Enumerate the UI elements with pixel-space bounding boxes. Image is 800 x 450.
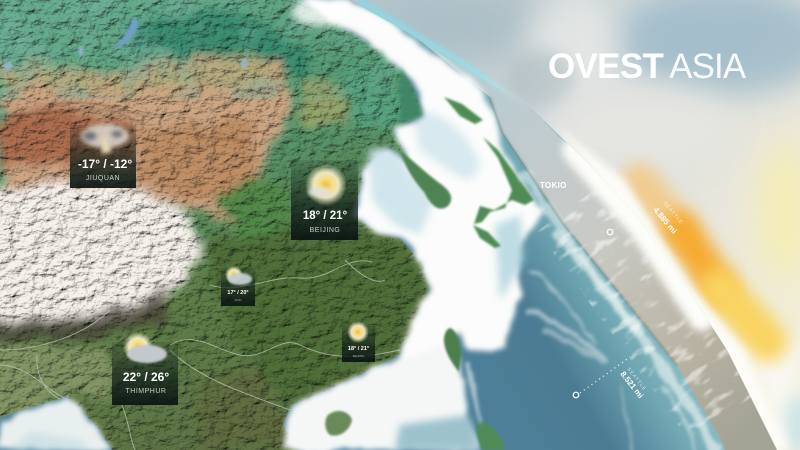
marker ring xyxy=(573,392,579,398)
weather card: Beijing small xyxy=(342,321,375,362)
land base xyxy=(0,0,450,450)
rivers xyxy=(0,260,400,450)
icon: sun behind cloud xyxy=(305,164,347,206)
top cloud veil xyxy=(292,0,348,26)
weather card: Thimphur xyxy=(112,332,178,405)
temperature: 17° / 20° xyxy=(227,290,249,296)
bright atmosphere edge xyxy=(358,0,525,105)
temperature: 18° / 21° xyxy=(348,346,369,352)
limb haze band xyxy=(422,42,777,450)
terrain relief texture xyxy=(0,0,450,450)
weather card: Xi'an small xyxy=(221,266,255,306)
distance label: 8.521 mi xyxy=(618,370,645,400)
temperature: 18° / 21° xyxy=(303,210,348,222)
brown ridges xyxy=(0,103,252,142)
korean peninsula xyxy=(400,150,451,209)
city name: THIMPHUR xyxy=(126,388,166,395)
leader dots xyxy=(580,357,630,393)
city name: XIAN xyxy=(234,298,242,302)
hainan xyxy=(325,411,352,436)
green patches xyxy=(2,3,398,100)
japan islands xyxy=(444,97,534,248)
ocean cloud streaks xyxy=(467,175,715,450)
taiwan xyxy=(444,328,461,372)
icon: sun and cloud xyxy=(225,266,252,285)
northern coast islands xyxy=(400,67,423,125)
temperature: -17° / -12° xyxy=(78,157,132,171)
icon: storm cloud xyxy=(81,124,129,154)
place label: SEATTLE xyxy=(661,200,684,226)
city name: BEIJING xyxy=(310,227,340,234)
limb dark inner edge xyxy=(490,97,677,365)
orange glow band xyxy=(640,182,768,342)
label: Tokio: TOKIO xyxy=(540,181,567,190)
weather card: Jiuquan xyxy=(70,124,136,188)
marker: Seattle second distance xyxy=(573,357,647,400)
lake baikal xyxy=(112,17,138,49)
limb cloud specks xyxy=(538,191,750,434)
limb white cloud xyxy=(575,150,702,318)
title: OVESTASIA xyxy=(548,47,747,86)
icon: sun xyxy=(347,321,369,343)
land colour zones xyxy=(0,15,425,450)
coastal cloud mass xyxy=(0,0,542,450)
icon: sun and cloud xyxy=(123,332,167,363)
leader dots xyxy=(613,210,640,230)
temperature: 22° / 26° xyxy=(123,370,169,384)
philippines xyxy=(476,422,505,450)
yellow sea haze xyxy=(10,110,525,450)
place label: SEATTLE xyxy=(625,367,647,392)
weather card: Beijing xyxy=(291,160,358,240)
city name: JIUQUAN xyxy=(86,175,120,182)
small lakes xyxy=(3,46,247,70)
distance label: 4.885 mi xyxy=(651,206,679,235)
marker ring xyxy=(607,229,613,235)
marker: Seattle distance xyxy=(607,200,684,235)
city name: BEIJING xyxy=(353,354,365,358)
